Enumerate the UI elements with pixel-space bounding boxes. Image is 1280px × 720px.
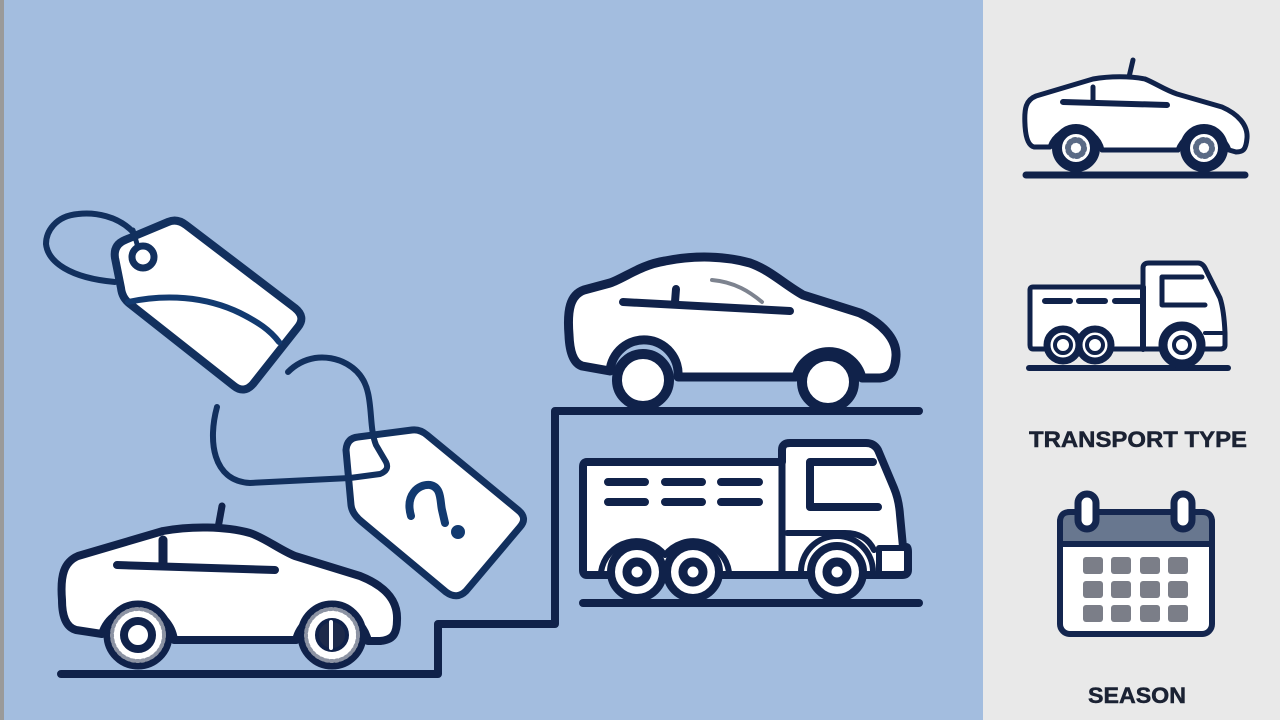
icon: connecting string bbox=[213, 357, 387, 483]
icon: truck large bbox=[583, 443, 919, 603]
icon: car bottom left bbox=[62, 506, 397, 666]
icon: calendar bbox=[1060, 494, 1212, 634]
icon: price tag with loop bbox=[46, 214, 301, 390]
label: transport type: TRANSPORT TYPE bbox=[1029, 427, 1247, 452]
label: season: SEASON bbox=[1088, 683, 1186, 708]
icon: price tag with question mark bbox=[346, 430, 524, 596]
icon: sidebar car bbox=[1025, 60, 1247, 175]
panel: sidebar bbox=[983, 0, 1280, 720]
icon: sidebar truck bbox=[1029, 263, 1228, 368]
icon: car top bbox=[568, 257, 896, 408]
stepped line bbox=[61, 411, 919, 674]
